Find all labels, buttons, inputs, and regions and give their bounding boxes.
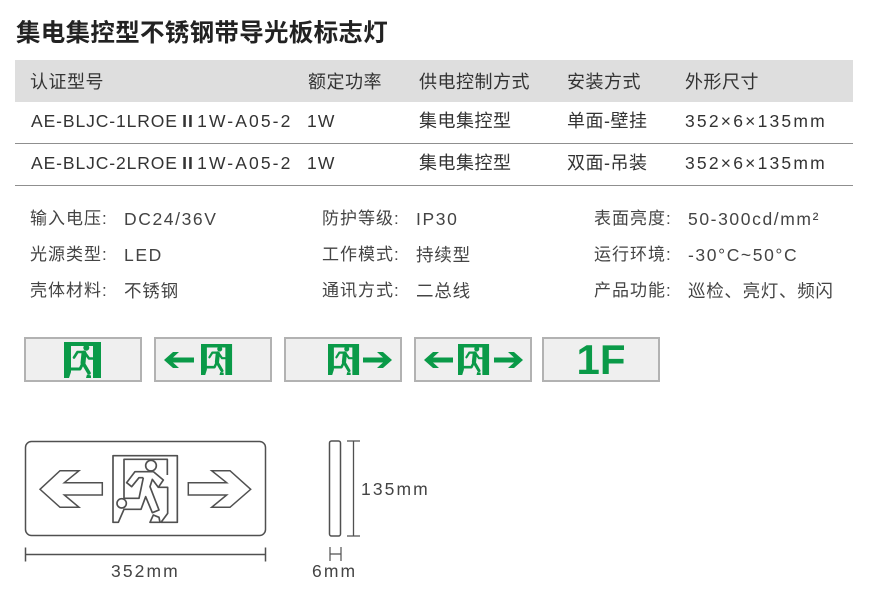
spec: environment: 运行环境: [594, 245, 672, 264]
spec: communication [322, 281, 471, 301]
spec: protection: 防护等级: [322, 209, 400, 228]
text: 巡检、亮灯、频闪 [688, 281, 834, 301]
row 2 size: 352×6×135mm [685, 153, 827, 173]
header: rated power: 额定功率 [308, 72, 382, 92]
spec: housing [30, 281, 179, 301]
running person door outline [113, 456, 177, 522]
text: 不锈钢 [124, 281, 179, 301]
title: 集电集控型不锈钢带导光板标志灯 [16, 20, 388, 47]
front view line drawing [24, 440, 266, 562]
sign outline [26, 442, 266, 536]
spec: work mode: 工作模式: [322, 245, 400, 264]
depth dimension mark [330, 547, 341, 561]
spec: brightness: 表面亮度: [594, 209, 672, 228]
header: dimensions: 外形尺寸 [685, 72, 759, 92]
spec: brightness [594, 209, 820, 229]
sign: exit door [24, 337, 142, 382]
row 1 model: AE-BLJC-1LROE II 1W-A05-2 [31, 111, 292, 131]
width dimension label: 352mm [111, 561, 180, 581]
text: DC24/36V [124, 209, 218, 229]
row 2 control: 集电集控型 [419, 153, 512, 173]
spec: protection [322, 209, 458, 229]
header: model: 认证型号 [30, 72, 104, 92]
header: mounting: 安装方式 [567, 72, 641, 92]
sign: double arrow exit [414, 337, 532, 382]
left outline arrow [40, 471, 102, 507]
sign: left arrow exit [154, 337, 272, 382]
spec: light source: 光源类型: [30, 245, 108, 264]
header: power control: 供电控制方式 [419, 72, 530, 92]
spec: functions: 产品功能: [594, 281, 672, 300]
width dimension line [26, 548, 266, 562]
depth dimension label: 6mm [312, 561, 357, 581]
side view line drawing [328, 440, 360, 561]
right outline arrow [188, 471, 251, 507]
spec: communication: 通讯方式: [322, 281, 400, 300]
height dimension line [347, 441, 360, 536]
row 1 power: 1W [307, 111, 335, 131]
spec: functions [594, 281, 834, 301]
row 1 size: 352×6×135mm [685, 111, 827, 131]
spec: work mode [322, 245, 471, 265]
row 2 model: AE-BLJC-2LROE II 1W-A05-2 [31, 153, 292, 173]
spec: input voltage [30, 209, 218, 229]
spec: environment [594, 245, 798, 265]
specification table [15, 60, 853, 186]
row 1 control: 集电集控型 [419, 111, 512, 131]
text: -30°C~50°C [688, 245, 798, 265]
row divider [15, 143, 853, 144]
text: 50-300cd/mm² [688, 209, 820, 229]
sign: floor label [542, 337, 660, 382]
table bottom rule [15, 185, 853, 186]
row 1 mounting: 单面-壁挂 [567, 111, 648, 131]
text: IP30 [416, 209, 458, 229]
spec: housing: 壳体材料: [30, 281, 108, 300]
row 2 mounting: 双面-吊装 [567, 153, 648, 173]
text: 二总线 [416, 281, 471, 301]
height dimension label: 135mm [361, 479, 430, 499]
table header band [15, 60, 853, 102]
text: 持续型 [416, 245, 471, 265]
sign: floor label: 1F [576, 336, 626, 383]
row 2 power: 1W [307, 153, 335, 173]
side panel outline [330, 441, 340, 536]
spec: light source [30, 245, 163, 265]
spec: input voltage: 输入电压: [30, 209, 108, 228]
sign: right arrow exit [284, 337, 402, 382]
text: LED [124, 245, 163, 265]
